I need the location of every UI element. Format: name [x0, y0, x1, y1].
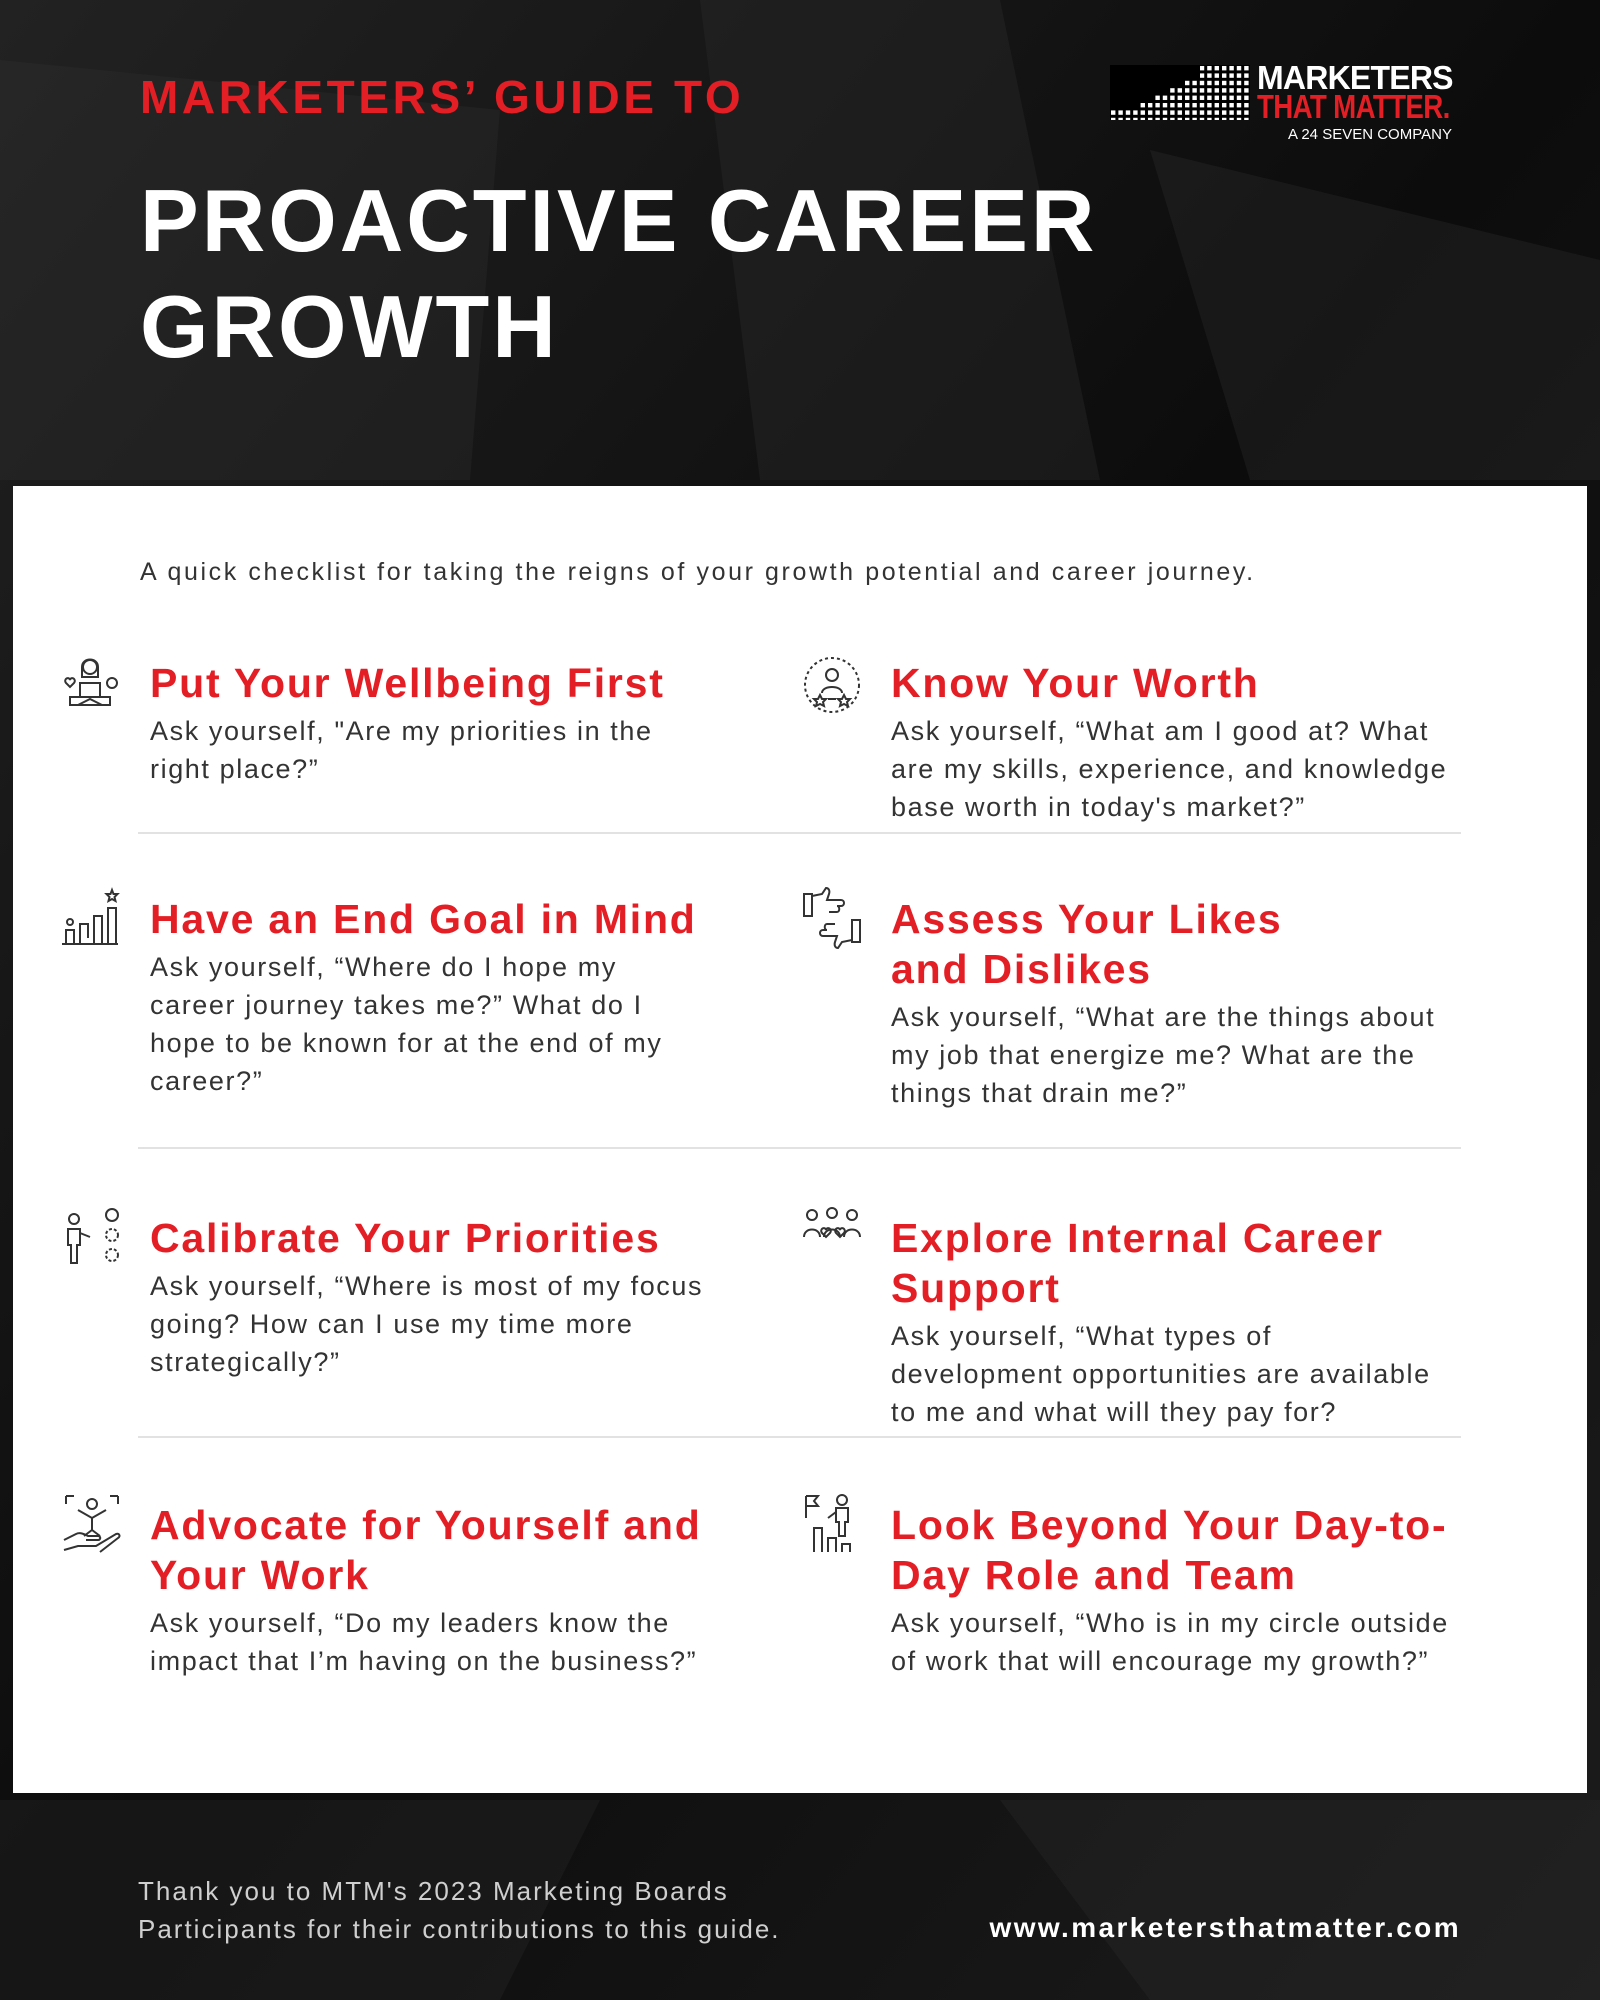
body: right place?”	[150, 754, 319, 784]
icon: person with options	[67, 1208, 119, 1264]
heading: Put Your Wellbeing First	[150, 660, 665, 706]
heading	[891, 896, 1282, 992]
title: GROWTH	[140, 277, 559, 376]
item: calibrate	[67, 1208, 703, 1377]
item: worth	[804, 657, 1447, 822]
body	[891, 1002, 1435, 1108]
body: Ask yourself, “What am I good at? What	[891, 716, 1429, 746]
body: impact that I’m having on the business?”	[150, 1646, 697, 1676]
icon: bar chart with star	[62, 887, 120, 945]
body	[150, 1608, 697, 1676]
body: hope to be known for at the end of my	[150, 1028, 662, 1058]
body	[150, 1271, 703, 1377]
body: career?”	[150, 1066, 263, 1096]
heading: and Dislikes	[891, 946, 1152, 992]
icon: person climbing bars	[805, 1494, 851, 1552]
intro text: A quick checklist for taking the reigns of your growth potential and career journey.	[140, 558, 1256, 586]
heading: Day Role and Team	[891, 1552, 1297, 1598]
item: internal support	[803, 1207, 1431, 1427]
heading	[150, 1502, 702, 1598]
icon: thumbs up and down	[803, 887, 861, 949]
body: going? How can I use my time more	[150, 1309, 633, 1339]
body: strategically?”	[150, 1347, 341, 1377]
heading: Know Your Worth	[891, 660, 1260, 706]
body: career journey takes me?” What do I	[150, 990, 643, 1020]
heading: Advocate for Yourself and	[150, 1502, 702, 1548]
heading: Support	[891, 1265, 1061, 1311]
body	[891, 1608, 1449, 1676]
icon: meditating person	[64, 658, 118, 706]
body: Ask yourself, “Who is in my circle outside	[891, 1608, 1449, 1638]
footer text: thanks: Participants for their contributions to this guide.	[138, 1914, 781, 1944]
body: my job that energize me? What are the	[891, 1040, 1415, 1070]
body: to me and what will they pay for?	[891, 1397, 1337, 1427]
heading: Explore Internal Career	[891, 1215, 1384, 1261]
body: base worth in today's market?”	[891, 792, 1306, 822]
heading: Calibrate Your Priorities	[150, 1215, 661, 1261]
body: Ask yourself, “Do my leaders know the	[150, 1608, 670, 1638]
body: development opportunities are available	[891, 1359, 1431, 1389]
panel: checklist	[13, 486, 1587, 1793]
item: wellbeing	[64, 658, 665, 784]
body	[891, 1321, 1431, 1427]
logo	[1110, 59, 1453, 143]
body	[891, 716, 1447, 822]
icon: hand holding person	[64, 1495, 120, 1553]
item: look beyond	[805, 1494, 1449, 1676]
body: Ask yourself, “Where is most of my focus	[150, 1271, 703, 1301]
subtitle: MARKETERS’ GUIDE TO	[140, 71, 744, 123]
item: advocate	[64, 1495, 702, 1676]
heading: Have an End Goal in Mind	[150, 896, 697, 942]
body	[150, 952, 662, 1096]
icon: group with hearts	[803, 1207, 861, 1238]
footer text: thanks: Thank you to MTM's 2023 Marketing Boards	[138, 1876, 729, 1906]
footer url: www.marketersthatmatter.com	[990, 1912, 1461, 1943]
logo: MARKETERS	[1257, 59, 1453, 96]
body: Ask yourself, "Are my priorities in the	[150, 716, 653, 746]
heading: Your Work	[150, 1552, 370, 1598]
icon: person with stars	[804, 657, 860, 713]
heading: Look Beyond Your Day-to-	[891, 1502, 1447, 1548]
heading: Assess Your Likes	[891, 896, 1282, 942]
body	[150, 716, 653, 784]
item: end goal	[62, 887, 697, 1096]
body: Ask yourself, “What types of	[891, 1321, 1272, 1351]
item: likes dislikes	[803, 887, 1435, 1108]
body: of work that will encourage my growth?”	[891, 1646, 1429, 1676]
body: things that drain me?”	[891, 1078, 1187, 1108]
heading	[891, 1502, 1447, 1598]
logo: A 24 SEVEN COMPANY	[1288, 126, 1452, 143]
heading	[891, 1215, 1384, 1311]
logo: THAT MATTER.	[1257, 88, 1450, 125]
body: are my skills, experience, and knowledge	[891, 754, 1447, 784]
footer text: thanks	[138, 1876, 781, 1944]
title	[140, 171, 1097, 376]
title: PROACTIVE CAREER	[140, 171, 1097, 270]
body: Ask yourself, “What are the things about	[891, 1002, 1435, 1032]
body: Ask yourself, “Where do I hope my	[150, 952, 617, 982]
